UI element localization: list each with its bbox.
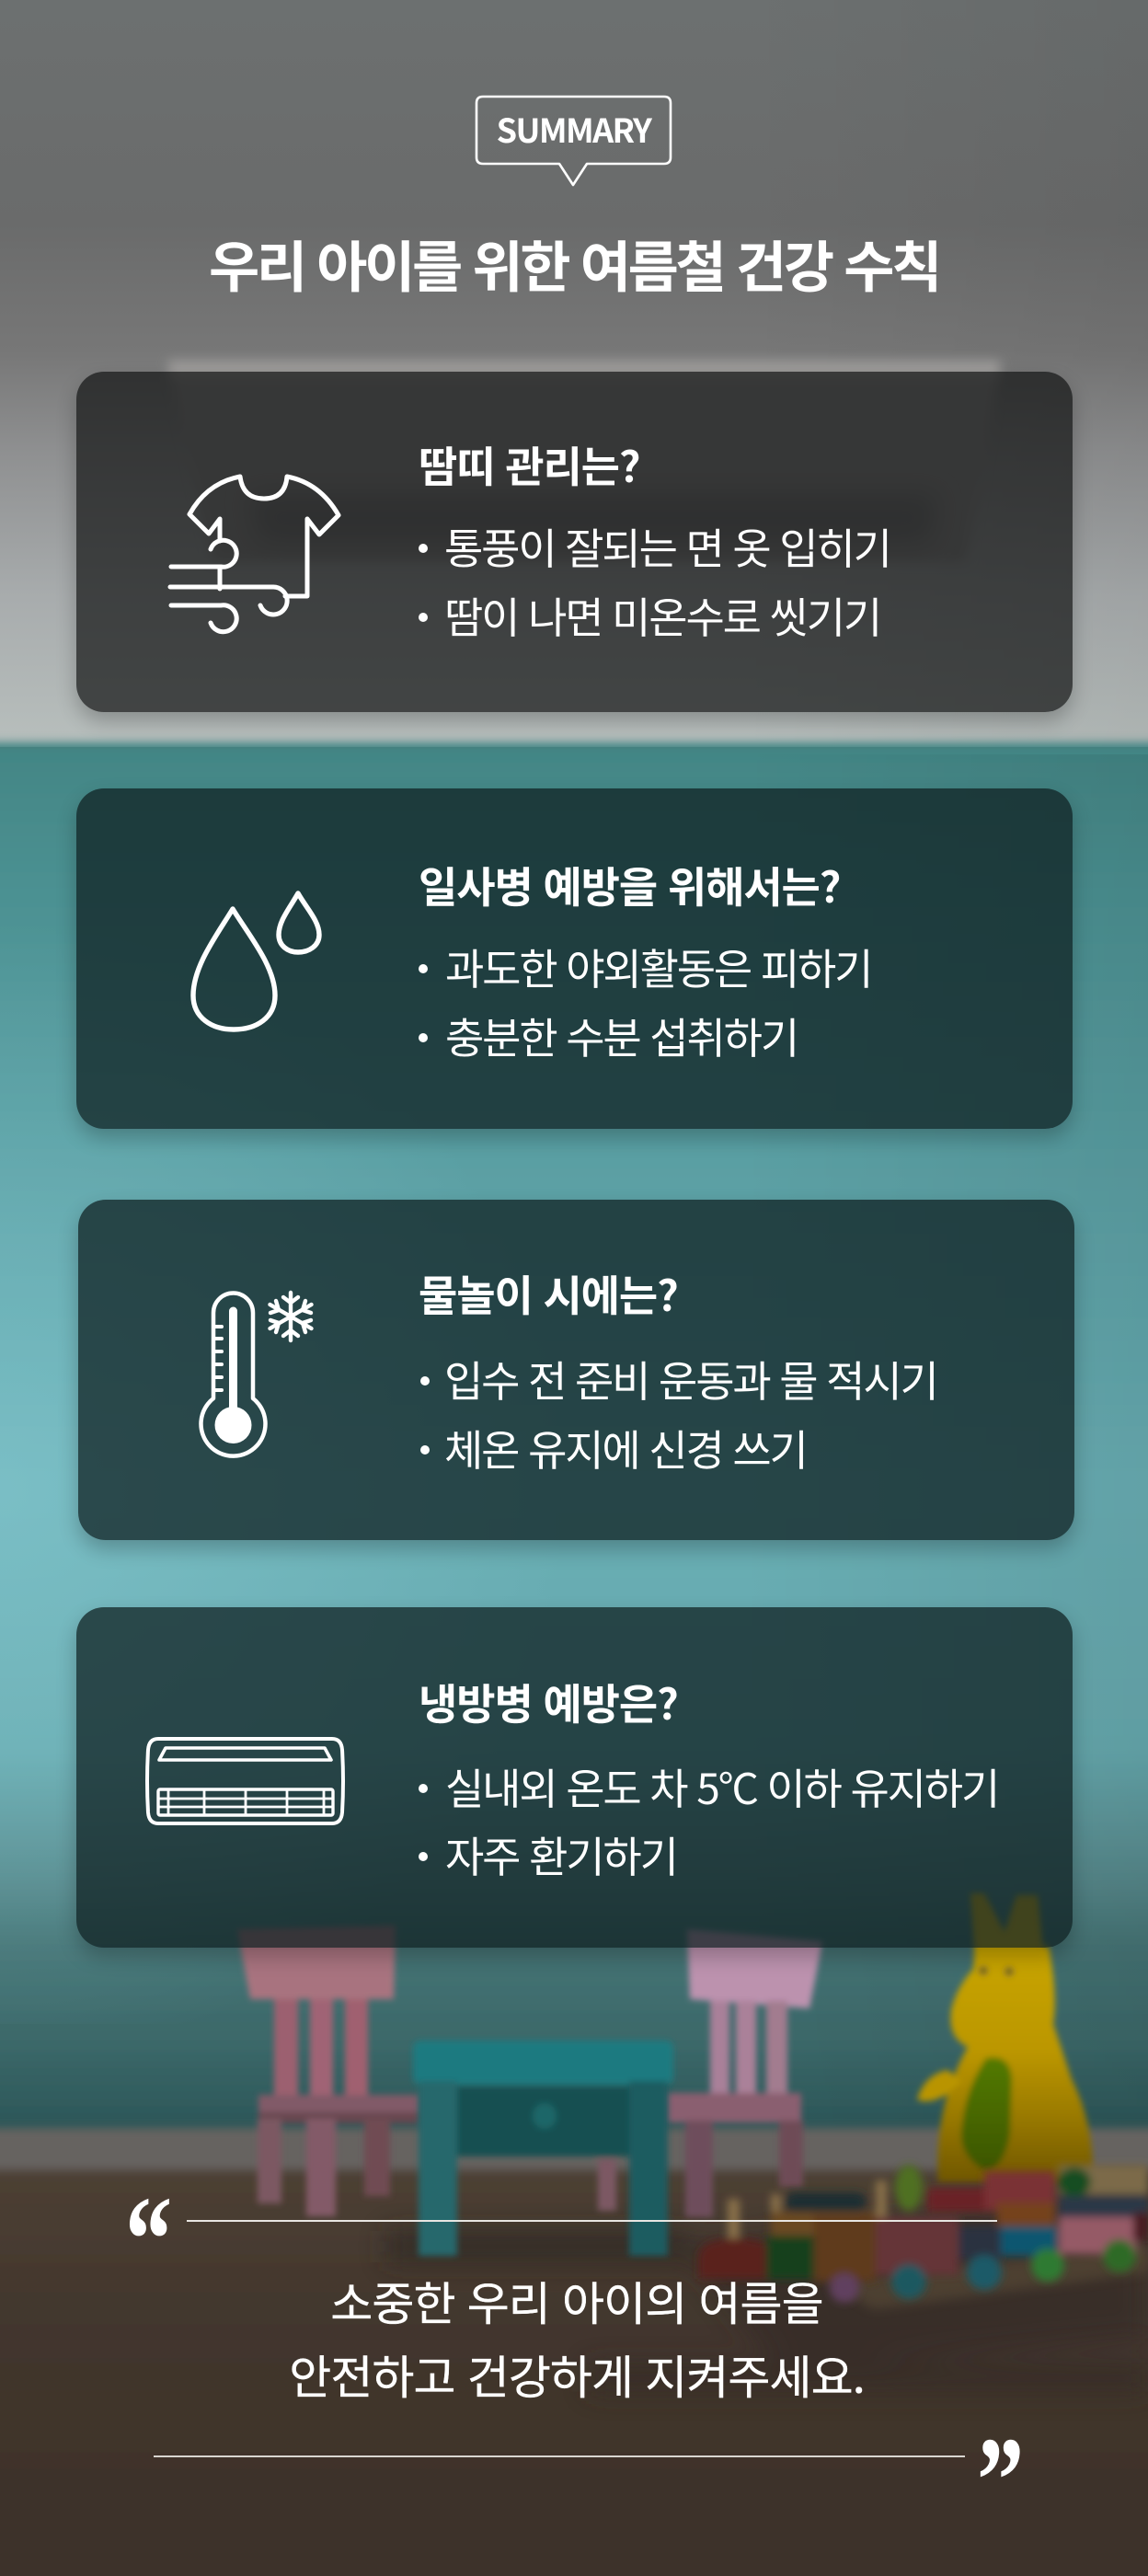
panel: heat stroke prevention <box>76 788 1073 1129</box>
icon: thermometer and snowflake <box>199 1290 314 1458</box>
icon: t-shirt with wind <box>167 475 341 635</box>
bullet dot 1 <box>419 1784 428 1793</box>
closing quotation mark: ” <box>977 2411 1024 2549</box>
bullet item 2: 충분한 수분 섭취하기 <box>445 1006 798 1066</box>
bullet dot 2 <box>419 1033 428 1042</box>
bullet item 1: 통풍이 잘되는 면 옷 입히기 <box>444 516 890 577</box>
bullet item 2: 자주 환기하기 <box>445 1824 677 1885</box>
panel: heat rash care <box>76 372 1073 712</box>
bullet item 1: 입수 전 준비 운동과 물 적시기 <box>444 1349 937 1409</box>
heading: 땀띠 관리는? <box>419 434 639 495</box>
bullet item 1: 과도한 야외활동은 피하기 <box>445 937 871 997</box>
icon: air conditioner <box>145 1737 345 1825</box>
heading: 냉방병 예방은? <box>419 1672 678 1732</box>
closing message: 소중한 우리 아이의 여름을 <box>330 2268 823 2334</box>
title: 우리 아이를 위한 여름철 건강 수칙 <box>209 224 939 304</box>
panel: air-conditioning sickness <box>76 1607 1073 1948</box>
dinosaur toy <box>917 1893 1093 2182</box>
bullet dot 2 <box>419 1852 428 1861</box>
top rule <box>187 2220 997 2222</box>
bottom rule <box>154 2455 965 2457</box>
bullet dot 2 <box>420 1445 430 1455</box>
badge: SUMMARY speech bubble <box>475 96 672 186</box>
bullet dot 1 <box>419 544 428 553</box>
bullet dot 2 <box>419 613 428 622</box>
closing message: 안전하고 건강하게 지켜주세요. <box>289 2341 865 2408</box>
icon: water drops <box>190 891 322 1032</box>
right chair <box>665 1929 822 2217</box>
badge: SUMMARY speech bubble: SUMMARY <box>497 105 650 153</box>
opening quotation mark: “ <box>125 2170 172 2308</box>
bullet item 2: 체온 유지에 신경 쓰기 <box>444 1418 807 1478</box>
table <box>413 2041 673 2256</box>
heading: 일사병 예방을 위해서는? <box>419 855 840 915</box>
bullet dot 1 <box>419 964 428 973</box>
left chair <box>237 1926 420 2216</box>
closing message <box>289 2268 865 2408</box>
bullet item 1: 실내외 온도 차 5°C 이하 유지하기 <box>445 1756 998 1817</box>
panel: water play <box>78 1200 1074 1540</box>
toy train <box>698 2165 1148 2303</box>
heading: 물놀이 시에는? <box>419 1263 678 1324</box>
bullet item 2: 땀이 나면 미온수로 씻기기 <box>444 585 880 646</box>
bullet dot 1 <box>420 1376 430 1386</box>
